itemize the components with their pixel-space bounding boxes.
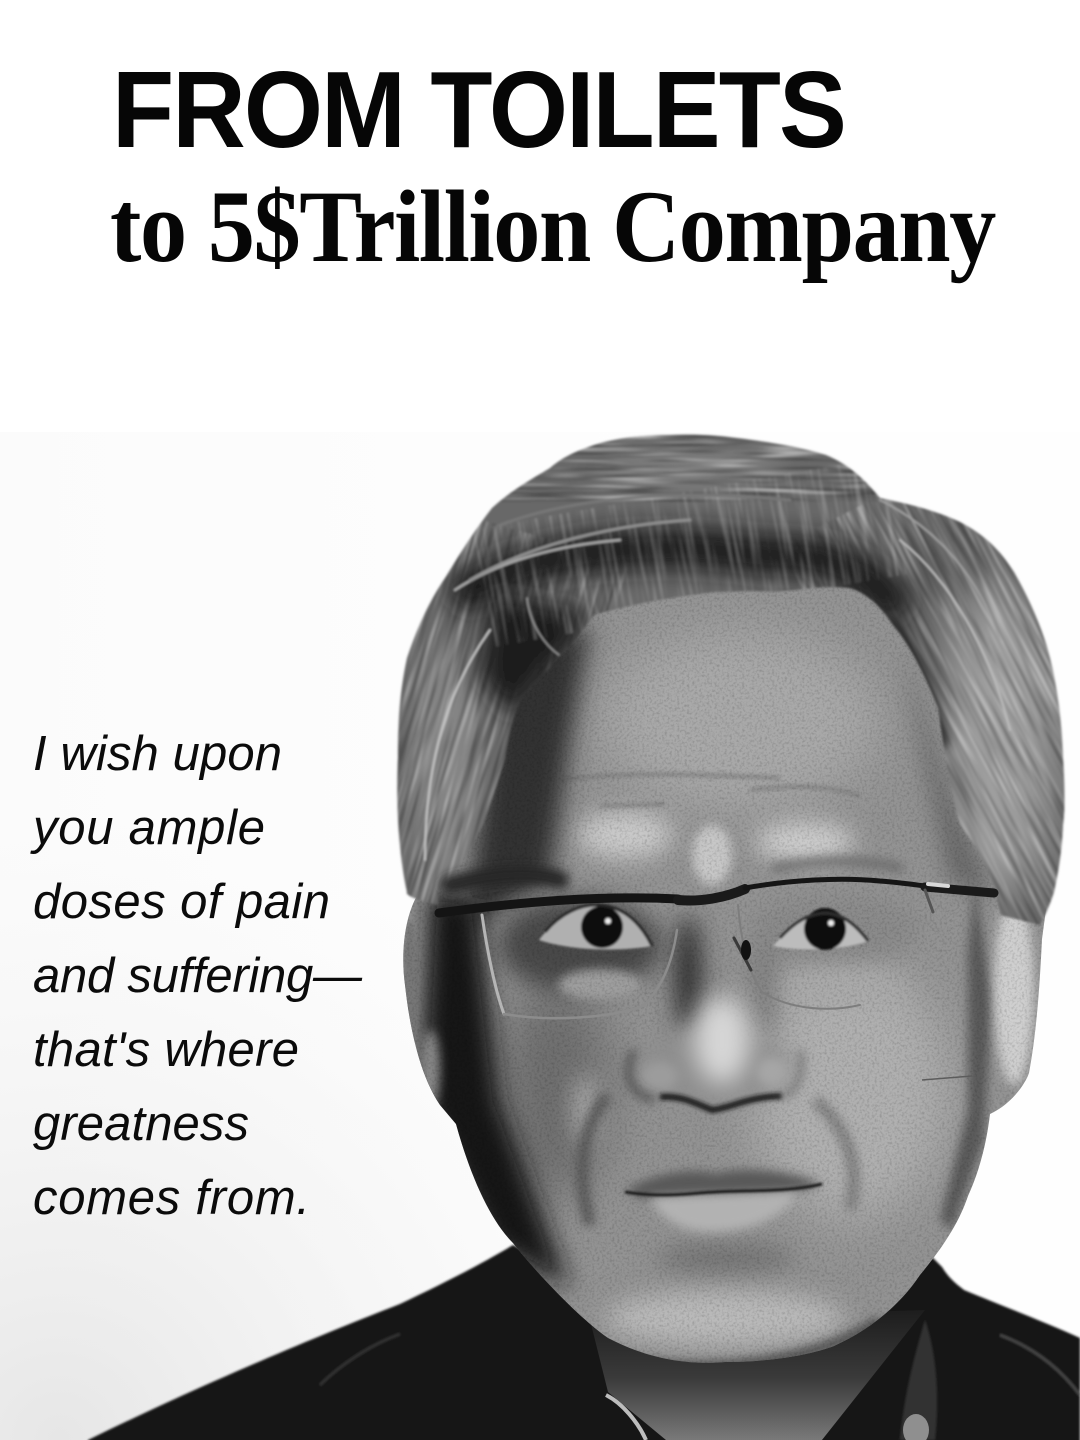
hair <box>396 433 1066 926</box>
quote text: and suffering— <box>33 949 363 1003</box>
shirt button <box>903 1414 929 1440</box>
jacket <box>88 1245 1080 1440</box>
neck <box>590 1310 925 1440</box>
nose <box>629 996 801 1110</box>
hair tone and strands <box>397 434 1065 944</box>
quote text: comes from. <box>33 1171 310 1225</box>
subtitle: to 5$ trillion company: to 5$Trillion Company <box>110 170 996 284</box>
face shading <box>400 580 1060 1380</box>
quote text: I wish upon <box>33 727 282 781</box>
title: from toilets: FROM TOILETS <box>112 49 845 171</box>
collar highlight <box>606 1395 646 1440</box>
strand texture: crown <box>504 434 894 502</box>
quote text: doses of pain <box>33 875 330 929</box>
left eye <box>539 905 652 950</box>
portrait photo panel <box>0 432 1080 1440</box>
right eye <box>773 908 868 950</box>
scar mark <box>922 1076 972 1080</box>
strand texture: right <box>796 500 1065 924</box>
mouth <box>625 1170 822 1232</box>
glasses <box>439 879 994 1018</box>
strand texture: front fan <box>473 456 907 647</box>
quote text: that's where <box>33 1023 299 1077</box>
dark hair band above forehead <box>470 548 890 600</box>
photo background <box>0 1032 416 1440</box>
quote text: you ample <box>30 801 265 855</box>
strand texture: left <box>397 522 626 903</box>
face <box>400 580 1060 1380</box>
quote text <box>30 727 363 1225</box>
eyebrows <box>450 861 900 885</box>
eye sockets <box>498 897 662 993</box>
dark temple patch <box>480 590 590 720</box>
quote text: greatness <box>33 1097 249 1151</box>
